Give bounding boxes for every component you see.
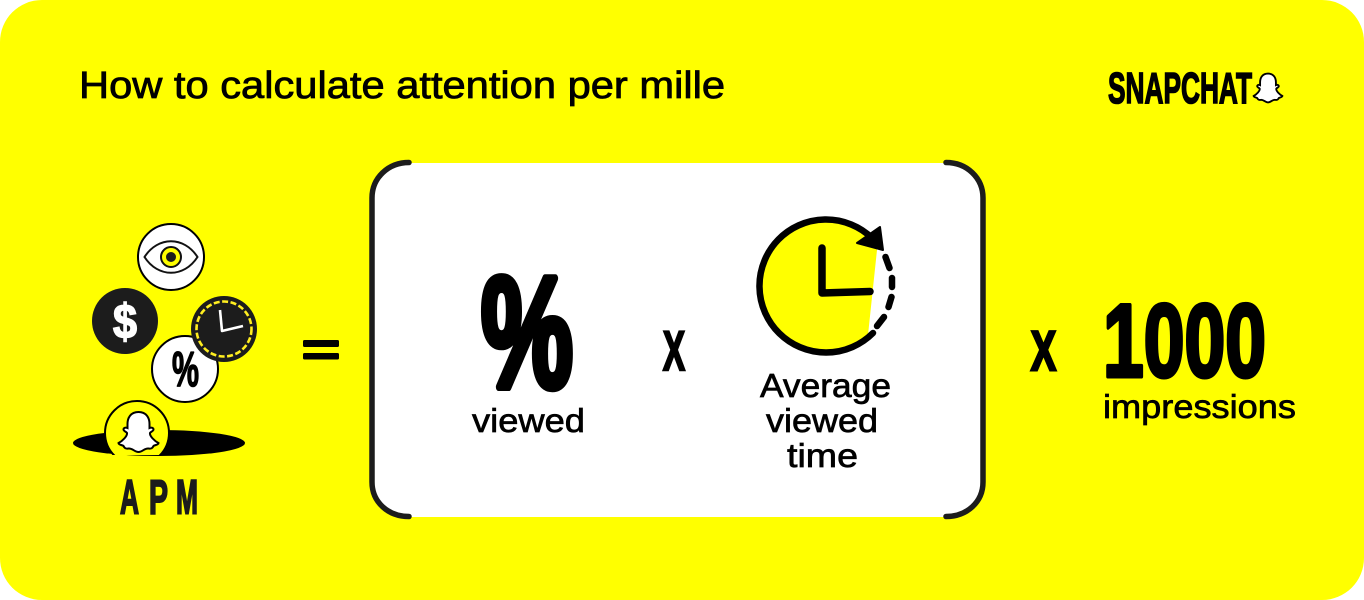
icon: eye coin (138, 224, 204, 290)
viewed label: viewed (472, 403, 585, 440)
1000 number: 1000 (1103, 284, 1266, 400)
icon: logo ghost (1254, 74, 1282, 102)
icon: hole (73, 430, 245, 456)
APM label: P (149, 472, 168, 524)
icon: percent coin (152, 336, 218, 402)
equals sign (303, 340, 339, 360)
multiply sign: X (663, 319, 685, 382)
APM label: A (120, 472, 139, 524)
title: How to calculate attention per mille (79, 65, 725, 107)
average viewed time label (760, 368, 891, 475)
icon: dollar coin: $ (113, 296, 137, 349)
APM label (120, 472, 198, 524)
icon: clock with arrow (759, 219, 892, 352)
average viewed time label: time (787, 438, 858, 475)
average viewed time label: viewed (766, 403, 878, 440)
multiply sign: X (1031, 319, 1056, 382)
icon: dollar coin (92, 288, 158, 354)
APM illustration (73, 224, 257, 465)
percent symbol: % (481, 245, 573, 421)
APM label: M (176, 472, 198, 524)
snapchat logo (1108, 64, 1282, 113)
icon: clock coin (191, 296, 257, 362)
impressions label: impressions (1103, 389, 1296, 426)
formula panel (372, 162, 983, 517)
left bracket (372, 162, 409, 516)
icon: percent coin: % (172, 343, 199, 397)
right bracket (946, 162, 983, 516)
average viewed time label: Average (760, 368, 891, 405)
icon: snapchat coin (104, 400, 170, 455)
white panel (372, 163, 983, 517)
logo wordmark: SNAPCHAT (1108, 64, 1252, 113)
